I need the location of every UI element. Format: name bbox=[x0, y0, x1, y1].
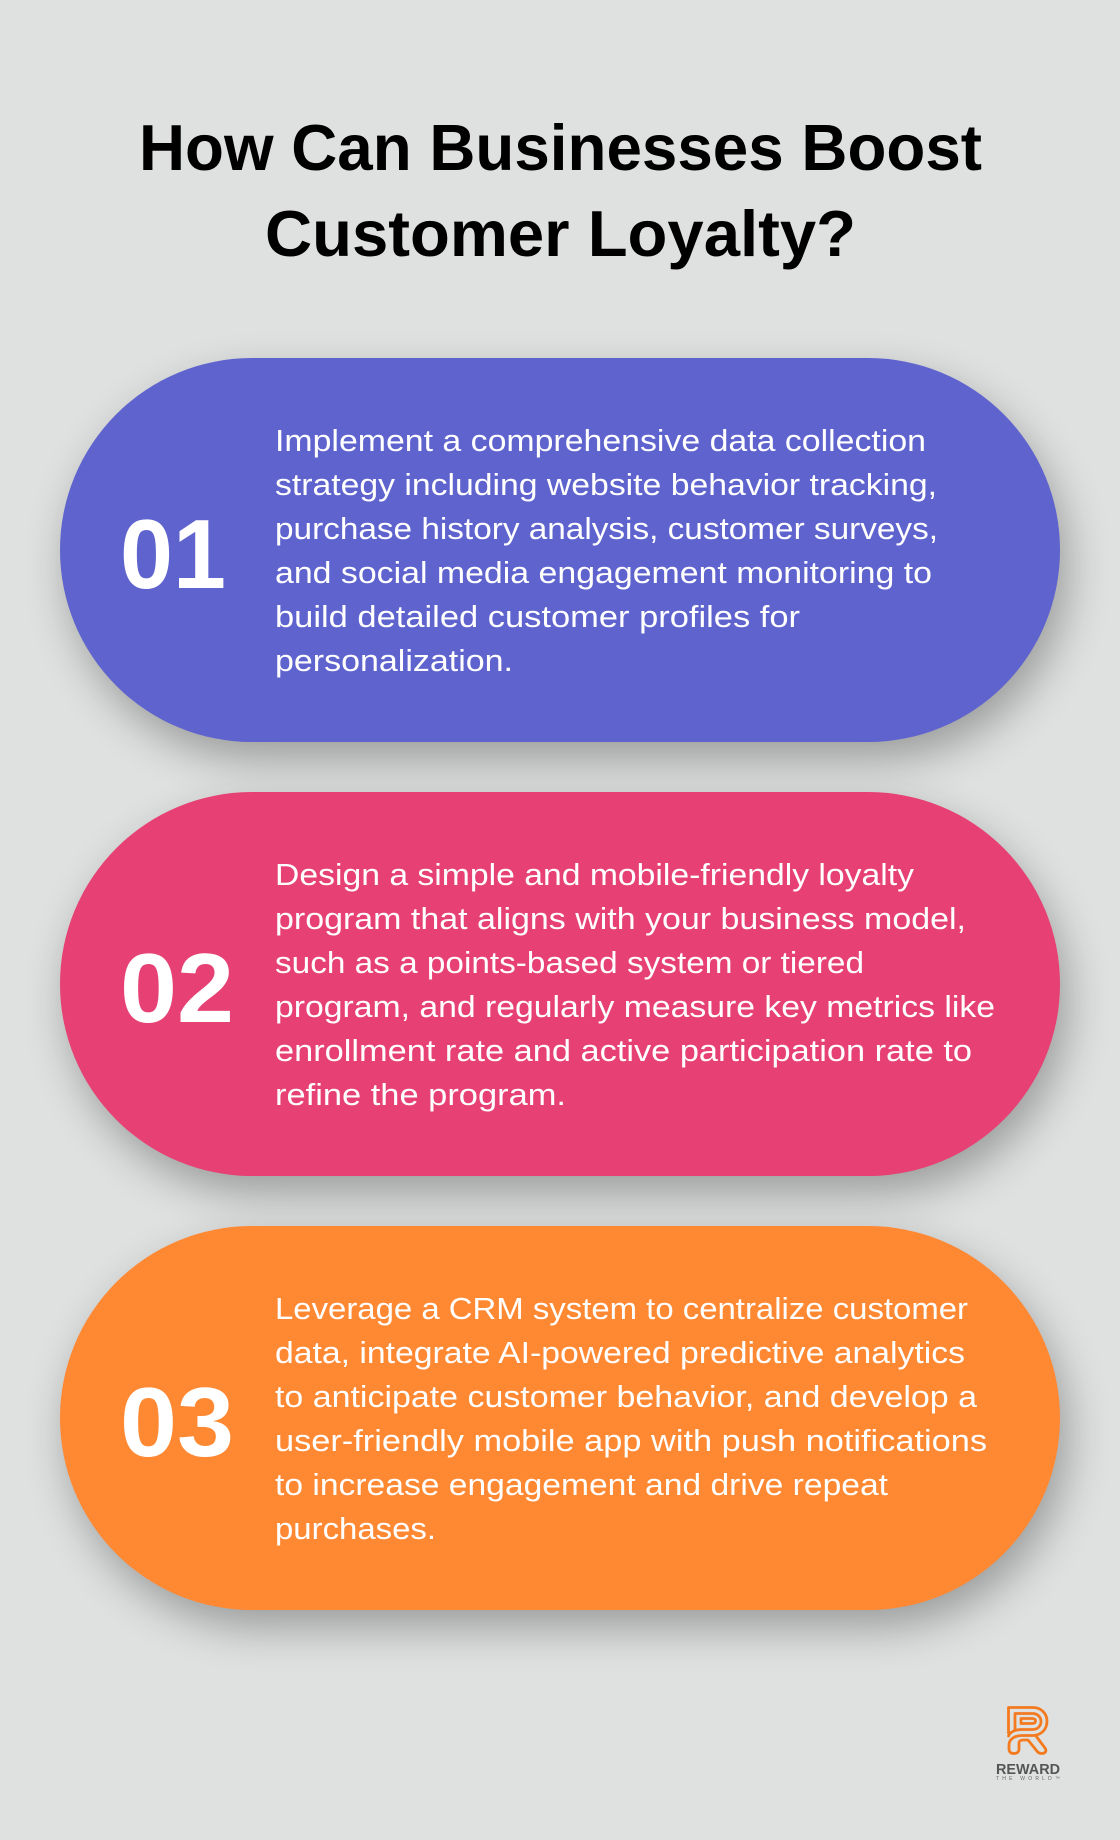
text block: step 3 bbox=[275, 1291, 987, 1546]
tagline: THE WORLD™ bbox=[996, 1776, 1060, 1782]
number 02: 02 bbox=[120, 933, 234, 1043]
text block: step 2: such as a points-based system or tiered bbox=[275, 945, 864, 980]
text block: step 1: strategy including website behavior tracking, bbox=[275, 467, 937, 502]
icon: R mark bbox=[1008, 1708, 1047, 1754]
title bbox=[139, 111, 982, 270]
text block: step 1 bbox=[275, 423, 938, 678]
text block: step 1: and social media engagement monitoring to bbox=[275, 555, 932, 590]
text block: step 2: Design a simple and mobile-friendly loyalty bbox=[275, 857, 915, 892]
text block: step 2: refine the program. bbox=[275, 1077, 566, 1112]
text block: step 3: data, integrate AI-powered predictive analytics bbox=[275, 1335, 965, 1370]
text block: step 2: program that aligns with your business model, bbox=[275, 901, 966, 936]
text block: step 2 bbox=[275, 857, 995, 1112]
text block: step 1: personalization. bbox=[275, 643, 513, 678]
text block: step 3: to anticipate customer behavior, and develop a bbox=[275, 1379, 978, 1414]
logo: Reward the World bbox=[996, 1708, 1060, 1782]
number 03: 03 bbox=[120, 1367, 234, 1477]
text block: step 2: program, and regularly measure key metrics like bbox=[275, 989, 995, 1024]
wordmark: REWARD bbox=[996, 1762, 1060, 1778]
text block: step 2: enrollment rate and active participation rate to bbox=[275, 1033, 972, 1068]
panel: step 3 background bbox=[60, 1226, 1060, 1610]
text block: step 1: Implement a comprehensive data collection bbox=[275, 423, 926, 458]
title: How Can Businesses Boost bbox=[139, 111, 982, 184]
text block: step 3: purchases. bbox=[275, 1511, 436, 1546]
text block: step 3: to increase engagement and drive repeat bbox=[275, 1467, 888, 1502]
text block: step 3: Leverage a CRM system to centralize customer bbox=[275, 1291, 968, 1326]
text block: step 3: user-friendly mobile app with push notifications bbox=[275, 1423, 987, 1458]
text block: step 1: build detailed customer profiles for bbox=[275, 599, 800, 634]
text block: step 1: purchase history analysis, customer surveys, bbox=[275, 511, 938, 546]
title: Customer Loyalty? bbox=[265, 197, 856, 270]
panel: step 1 background bbox=[60, 358, 1060, 742]
number 01: 01 bbox=[120, 499, 226, 609]
panel: step 2 background bbox=[60, 792, 1060, 1176]
